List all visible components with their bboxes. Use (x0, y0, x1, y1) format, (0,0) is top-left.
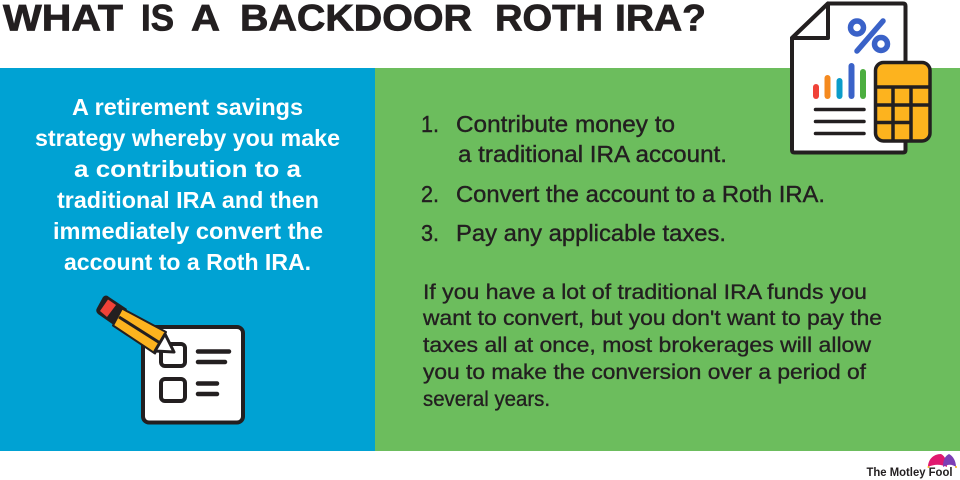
explanatory paragraph: you to make the conversion over a period of (423, 361, 866, 384)
numbered steps: 2. (421, 181, 439, 207)
definition text: a contribution to a (74, 156, 301, 182)
numbered steps: a traditional IRA account. (458, 141, 727, 167)
definition text: immediately convert the (53, 218, 323, 244)
explanatory paragraph: several years. (423, 388, 550, 411)
icon: checklist and pencil (96, 296, 243, 422)
numbered steps: Contribute money to (456, 111, 675, 137)
explanatory paragraph: taxes all at once, most brokerages will allow (423, 334, 872, 357)
definition text: strategy whereby you make (35, 125, 340, 151)
definition text (35, 94, 340, 275)
explanatory paragraph: If you have a lot of traditional IRA funds you (423, 281, 867, 304)
definition text: account to a Roth IRA. (64, 249, 311, 275)
numbered steps: Pay any applicable taxes. (456, 220, 726, 246)
calculator (875, 62, 930, 141)
numbered steps: 1. (421, 111, 439, 137)
definition text: traditional IRA and then (57, 187, 319, 213)
explanatory paragraph: want to convert, but you don't want to pay the (422, 307, 882, 330)
explanatory paragraph (422, 281, 882, 411)
logo: The Motley Fool (866, 454, 957, 479)
panel: steps (375, 68, 960, 451)
jester hat (928, 454, 957, 468)
numbered steps: 3. (421, 220, 439, 246)
panel: definition (0, 68, 375, 451)
numbered steps (421, 111, 825, 246)
logo: The Motley Fool: The Motley Fool (866, 467, 952, 479)
icon: document with chart and calculator (792, 4, 930, 152)
title (3, 0, 706, 39)
mini bar chart (816, 66, 863, 96)
definition text: A retirement savings (72, 94, 303, 120)
numbered steps: Convert the account to a Roth IRA. (456, 181, 825, 207)
percent sign (850, 21, 888, 51)
